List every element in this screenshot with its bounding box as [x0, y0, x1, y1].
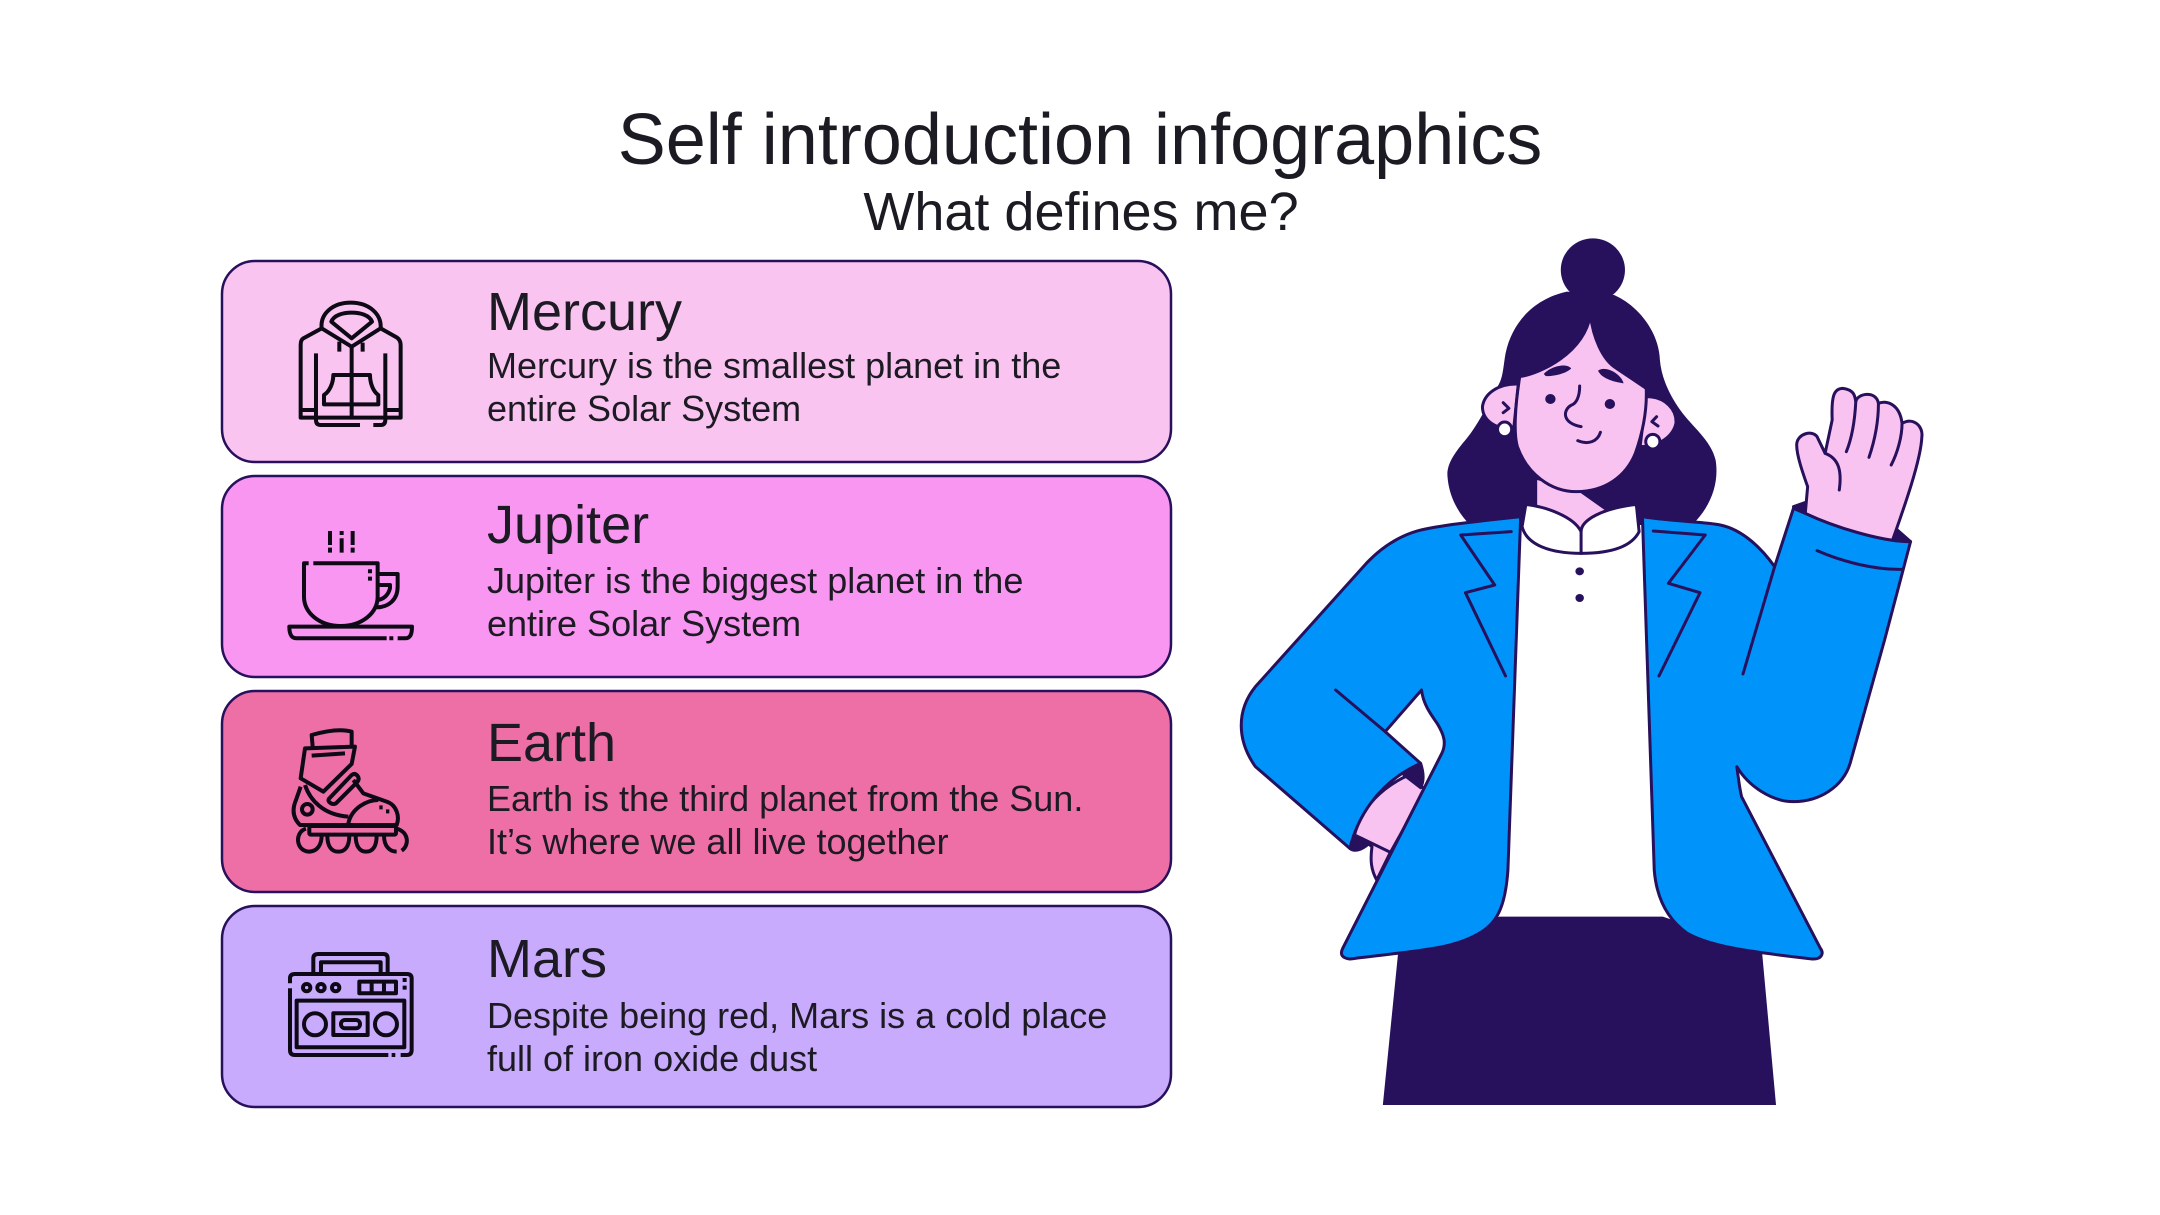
- left hand: [1350, 763, 1425, 880]
- text: Mars description: full of iron oxide dust: [487, 1038, 817, 1079]
- text: Jupiter description: Jupiter is the biggest planet in the: [487, 560, 1023, 601]
- shirt buttons: [1575, 567, 1584, 602]
- text: Jupiter description: entire Solar System: [487, 603, 801, 644]
- right hand: [1793, 388, 1922, 542]
- jacket details: lapels and seams: [1336, 531, 1902, 732]
- illustration: waving woman: [1241, 238, 1922, 1105]
- hair and bun: [1447, 238, 1716, 525]
- heading: Jupiter: Jupiter: [487, 495, 649, 555]
- text: Mercury description: entire Solar System: [487, 388, 801, 429]
- icon: coffee cup: [289, 531, 412, 638]
- heading: Earth: Earth: [487, 713, 616, 773]
- panel: Mars: [222, 906, 1171, 1107]
- text: Mars description: Despite being red, Mars is a cold place: [487, 995, 1107, 1036]
- panel: Earth: [222, 691, 1171, 892]
- panel: Jupiter: [222, 476, 1171, 677]
- jacket right: [1642, 508, 1911, 959]
- nose and smile: [1565, 386, 1600, 443]
- eyebrows and eyes: [1544, 366, 1624, 409]
- collar: [1522, 504, 1639, 553]
- earrings: [1498, 422, 1660, 449]
- heading: Mercury: Mercury: [487, 282, 682, 342]
- neck: [1537, 480, 1605, 537]
- text: Earth description: It’s where we all live together: [487, 821, 949, 862]
- pants: [1383, 917, 1776, 1105]
- subtitle: What defines me?: [863, 182, 1299, 242]
- panel: Mercury: [222, 261, 1171, 462]
- icon: boombox: [290, 954, 412, 1055]
- text: Mercury description: Mercury is the smallest planet in the: [487, 345, 1061, 386]
- ears: [1482, 384, 1676, 447]
- icon: roller skate: [294, 730, 407, 852]
- title: Self introduction infographics: [618, 100, 1542, 180]
- icon: hoodie: [301, 303, 401, 425]
- text: Earth description: Earth is the third planet from the Sun.: [487, 778, 1083, 819]
- face: [1515, 315, 1646, 492]
- heading: Mars: Mars: [487, 929, 607, 989]
- jacket left: [1241, 517, 1521, 959]
